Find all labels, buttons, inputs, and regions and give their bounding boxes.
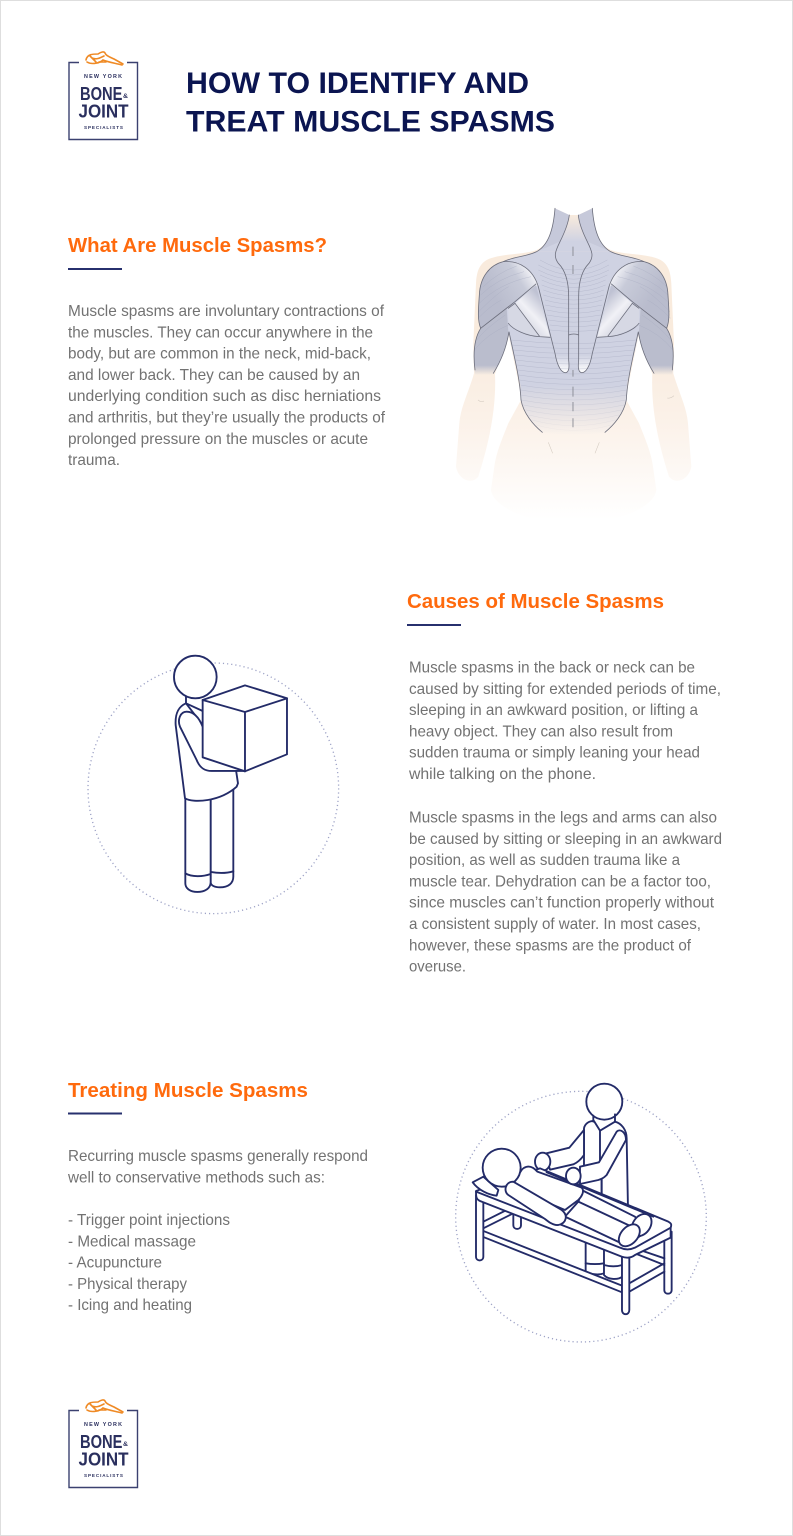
- muscle outlines: right side: [569, 208, 673, 432]
- logo icon: reclining figure: [86, 52, 123, 65]
- table shelf: [483, 1207, 664, 1292]
- back muscles illustration: [456, 208, 691, 525]
- patient torso: [510, 1167, 583, 1210]
- logo: bottom: [69, 1400, 138, 1488]
- paragraph: back and neck: caused by sitting for extended periods of time,: [409, 681, 721, 698]
- paragraph: back and neck: while talking on the phone.: [408, 766, 596, 783]
- paragraph: legs and arms: Muscle spasms in the legs and arms can also: [409, 810, 717, 826]
- paragraph: legs and arms: be caused by sitting or sleeping in an awkward: [409, 831, 722, 848]
- treatment list: - Medical massage: [68, 1233, 196, 1250]
- logo: bottom: JOINT: [78, 1450, 128, 1470]
- paragraph: definition: underlying condition such as disc herniations: [68, 388, 381, 405]
- paragraph: legs and arms: muscle tear. Dehydration can be a factor too,: [409, 873, 711, 890]
- paragraph: legs and arms: since muscles can’t function properly without: [409, 895, 715, 912]
- head: [174, 656, 217, 698]
- logo: top: JOINT: [78, 102, 128, 122]
- paragraph: back and neck: sleeping in an awkward position, or lifting a: [409, 702, 698, 719]
- treatment list: - Acupuncture: [68, 1255, 162, 1272]
- paragraph: intro: [67, 1148, 368, 1186]
- torso: [176, 703, 238, 801]
- logo: bottom: NEW YORK: [84, 1422, 122, 1428]
- logo: top: NEW YORK: [84, 74, 122, 80]
- heading underline: [407, 624, 461, 626]
- paragraph: back and neck: [408, 660, 721, 783]
- patient pillow: [473, 1177, 498, 1196]
- paragraph: legs and arms: position, as well as sudden trauma like a: [409, 852, 680, 869]
- heading: treating: Treating Muscle Spasms: [68, 1079, 308, 1102]
- paragraph: legs and arms: [409, 810, 722, 976]
- therapist head: [586, 1084, 622, 1120]
- treatment list: - Icing and heating: [68, 1297, 192, 1314]
- logo: top: SPECIALISTS: [84, 125, 123, 130]
- treatment list: - Trigger point injections: [68, 1212, 230, 1229]
- spine dashes: [572, 247, 574, 427]
- muscle fill: trapezius neck strips: [537, 208, 611, 252]
- logo: bottom: SPECIALISTS: [84, 1473, 123, 1478]
- table top: [476, 1168, 671, 1258]
- title: TREAT MUSCLE SPASMS: [186, 106, 555, 138]
- therapist body: [584, 1084, 628, 1208]
- legs: [211, 788, 233, 887]
- paragraph: definition: prolonged pressure on the muscles or acute: [68, 431, 368, 448]
- illustration: massage on treatment table: [456, 1084, 706, 1342]
- muscle fill: shoulders and upper arms: [474, 262, 673, 375]
- logo: top: &: [123, 94, 129, 100]
- paragraph: legs and arms: however, these spasms are the product of: [409, 937, 692, 954]
- paragraph: definition: and arthritis, but they’re usually the products of: [68, 410, 386, 426]
- box: [203, 685, 287, 771]
- heading: causes: Causes of Muscle Spasms: [407, 590, 664, 613]
- patient head: [483, 1149, 521, 1187]
- paragraph: legs and arms: a consistent supply of water. In most cases,: [409, 916, 701, 933]
- muscle fill: lower back: [520, 385, 627, 434]
- dotted circle: [88, 663, 339, 914]
- treatment list: - Physical therapy: [68, 1276, 187, 1293]
- logo: top: [69, 52, 138, 140]
- logo: top: BONE: [80, 84, 122, 104]
- muscle highlights: [478, 261, 669, 373]
- title: HOW TO IDENTIFY AND: [186, 67, 529, 100]
- logo: bottom: &: [123, 1442, 129, 1448]
- paragraph: definition: the muscles. They can occur anywhere in the: [68, 324, 373, 341]
- illustration: person lifting a box: [88, 656, 339, 914]
- skin silhouette: [456, 208, 691, 525]
- heading underline: [68, 268, 122, 270]
- patient far leg: [577, 1190, 647, 1238]
- paragraph: definition: body, but are common in the neck, mid-back,: [68, 346, 371, 363]
- paragraph: back and neck: sudden trauma or simply leaning your head: [409, 745, 700, 762]
- muscle fibre lines: [474, 260, 673, 430]
- therapist arm: near: [566, 1130, 626, 1184]
- heading: what are muscle spasms: What Are Muscle Spasms?: [68, 234, 327, 257]
- paragraph: back and neck: heavy object. They can also result from: [409, 723, 673, 740]
- paragraph: definition: Muscle spasms are involuntary contractions of: [68, 303, 385, 320]
- patient near leg: [565, 1202, 632, 1245]
- heading underline: [68, 1112, 122, 1114]
- table legs: back: [513, 1213, 521, 1229]
- neck: [186, 697, 203, 711]
- treatment list: [68, 1212, 230, 1314]
- section 3: treating muscle spasms: [67, 1079, 368, 1314]
- paragraph: definition: and lower back. They can be caused by an: [68, 367, 360, 384]
- title: [186, 67, 555, 138]
- logo icon: reclining figure: [86, 1400, 123, 1413]
- muscle outlines: left side: [474, 208, 569, 432]
- paragraph: definition: [68, 303, 386, 469]
- section 1: what are muscle spasms: [68, 234, 386, 469]
- paragraph: back and neck: Muscle spasms in the back or neck can be: [409, 660, 695, 676]
- paragraph: intro: well to conservative methods such as:: [67, 1169, 325, 1186]
- skin creases: [478, 396, 674, 453]
- therapist legs: [586, 1242, 622, 1279]
- paragraph: legs and arms: overuse.: [409, 959, 466, 976]
- logo frame: [69, 62, 138, 140]
- table legs: front: [476, 1195, 483, 1260]
- paragraph: definition: trauma.: [68, 452, 120, 469]
- muscle fill: upper back: [503, 252, 644, 385]
- therapist arm: far: [545, 1130, 584, 1170]
- patient arm: [506, 1182, 566, 1225]
- muscle fill: neck: [537, 215, 611, 252]
- paragraph: intro: Recurring muscle spasms generally respond: [68, 1148, 368, 1165]
- arm: [179, 712, 245, 771]
- dotted circle: [456, 1091, 706, 1342]
- logo: bottom: BONE: [80, 1432, 122, 1452]
- section 2: causes of muscle spasms: [407, 590, 722, 976]
- logo frame: [69, 1410, 138, 1488]
- patient: [473, 1149, 656, 1250]
